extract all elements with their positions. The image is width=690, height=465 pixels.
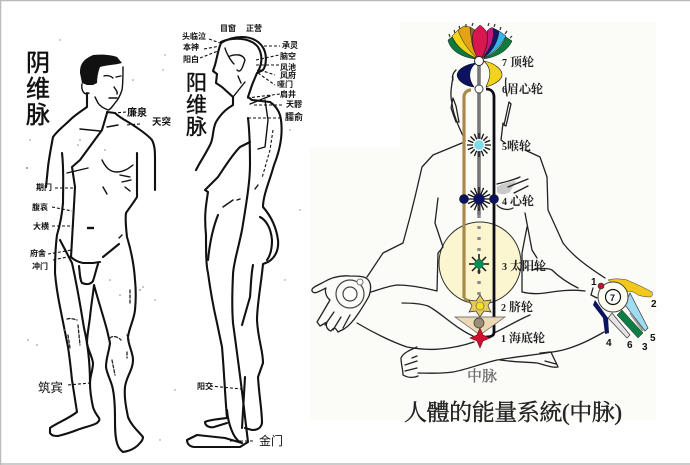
chakra labels (501, 54, 546, 345)
title: yin wei meridian: 脉 (26, 102, 50, 129)
chakra labels: 3 太阳轮 (502, 258, 546, 273)
belly and front leg outline (205, 142, 250, 427)
acupoint labels: 天髎 (286, 100, 302, 109)
hand numbers: 6 (627, 340, 633, 351)
root inner circle (474, 318, 484, 328)
left channel foot (464, 298, 473, 304)
head side ears (451, 98, 511, 126)
chakra labels: 4 心轮 (502, 193, 534, 208)
solar chakra (469, 254, 489, 274)
hand numbers: 2 (651, 299, 657, 310)
right channel, black (486, 89, 494, 337)
acupoint labels: 大横 (33, 221, 49, 231)
hand numbers: 1 (591, 277, 597, 288)
acupoint labels: 腹哀 (32, 202, 48, 212)
title: yin wei meridian: 阴 (26, 50, 50, 77)
centre line and front foot (187, 118, 250, 447)
head outline top (452, 70, 507, 96)
acupoint labels (182, 23, 303, 448)
figure: side view with yang wei meridian (182, 23, 303, 448)
title: yang wei meridian: 脉 (186, 116, 207, 139)
central channel label: 中脉 (467, 368, 497, 385)
figure: front view with yin wei meridian (30, 55, 172, 452)
chakra labels: 7 顶轮 (502, 54, 534, 69)
title: yang wei meridian: 维 (186, 94, 207, 117)
hand numbers: 4 (606, 338, 612, 349)
chakra labels: 5喉轮 (502, 138, 531, 153)
central channel dashes (477, 215, 481, 304)
acupoint labels: 筑宾 (38, 380, 63, 395)
acupoint labels: 冲门 (32, 261, 48, 271)
acupoint labels: 头临泣 (182, 31, 206, 41)
crown lotus (448, 23, 512, 59)
hand numbers: 3 (642, 342, 648, 353)
chest detail (67, 125, 133, 238)
brow circle (475, 85, 483, 93)
hand numbers (591, 277, 657, 353)
meridian on head (221, 39, 261, 71)
caption: energy system: 人體的能量系統(中脉) (404, 400, 622, 425)
title: yang wei meridian: 阳 (186, 72, 207, 95)
back and rear leg outline (221, 37, 282, 430)
heart chakra (460, 187, 498, 211)
acupoint labels: 目窗 (220, 23, 236, 33)
hand numbers: 7 (610, 293, 615, 303)
crown circle (474, 56, 484, 66)
body outline (46, 93, 155, 452)
acupoint labels: 期门 (36, 182, 52, 192)
ear, arm and torso detail (223, 48, 270, 207)
acupoint labels: 阳交 (197, 381, 213, 391)
acupoint labels: 臑俞 (285, 111, 303, 122)
acupoint labels: 府舍 (30, 248, 46, 258)
solar plexus glow (439, 222, 521, 304)
left hand (312, 276, 371, 332)
root chakra (470, 328, 490, 348)
chakra labels: 2 脐轮 (501, 299, 533, 314)
right hand with coloured fingers (591, 279, 652, 338)
hand numbers: 5 (650, 333, 656, 344)
speckle noise (26, 39, 301, 441)
root triangle (455, 317, 505, 335)
acupoint labels: 正营 (246, 23, 262, 33)
arm dashes (262, 130, 273, 178)
central channel, grey (477, 65, 481, 215)
navel mark (87, 227, 94, 229)
face and chest outline (196, 43, 233, 170)
navel chakra (469, 295, 491, 317)
acupoint dashed leaders (48, 112, 140, 385)
acupoint labels: 廉泉 (127, 106, 147, 119)
knee detail (67, 290, 130, 375)
acupoint labels: 脑空 (280, 51, 296, 61)
chakra labels: 6眉心轮 (502, 81, 543, 96)
title: yin wei meridian: 维 (26, 76, 50, 103)
acupoint labels: 本神 (183, 42, 199, 52)
left channel, tan (464, 90, 471, 298)
seated body outline (357, 77, 605, 377)
hair (80, 55, 122, 85)
acupoint labels: 金门 (259, 433, 283, 448)
acupoint labels: 承灵 (282, 40, 298, 50)
brow chakra lobes (457, 63, 476, 87)
acupoint labels (30, 106, 172, 395)
acupoint labels: 肩井 (280, 89, 296, 99)
figure: seated body with chakras (312, 23, 657, 385)
wing beside heart (497, 177, 528, 209)
throat chakra (467, 133, 491, 157)
acupoint dashed leaders (200, 39, 282, 441)
acupoint labels: 阳白 (183, 54, 199, 64)
meridian line (60, 113, 107, 384)
acupoint labels: 天突 (152, 116, 172, 128)
buttock and rear leg detail (208, 215, 272, 442)
acupoint labels: 风府 (280, 70, 296, 80)
groin outline (71, 244, 119, 284)
acupoint labels: 风池 (280, 62, 296, 72)
face, ear and neck (82, 67, 123, 110)
acupoint labels: 哑门 (277, 79, 293, 89)
chakra labels: 1 海底轮 (501, 330, 545, 345)
